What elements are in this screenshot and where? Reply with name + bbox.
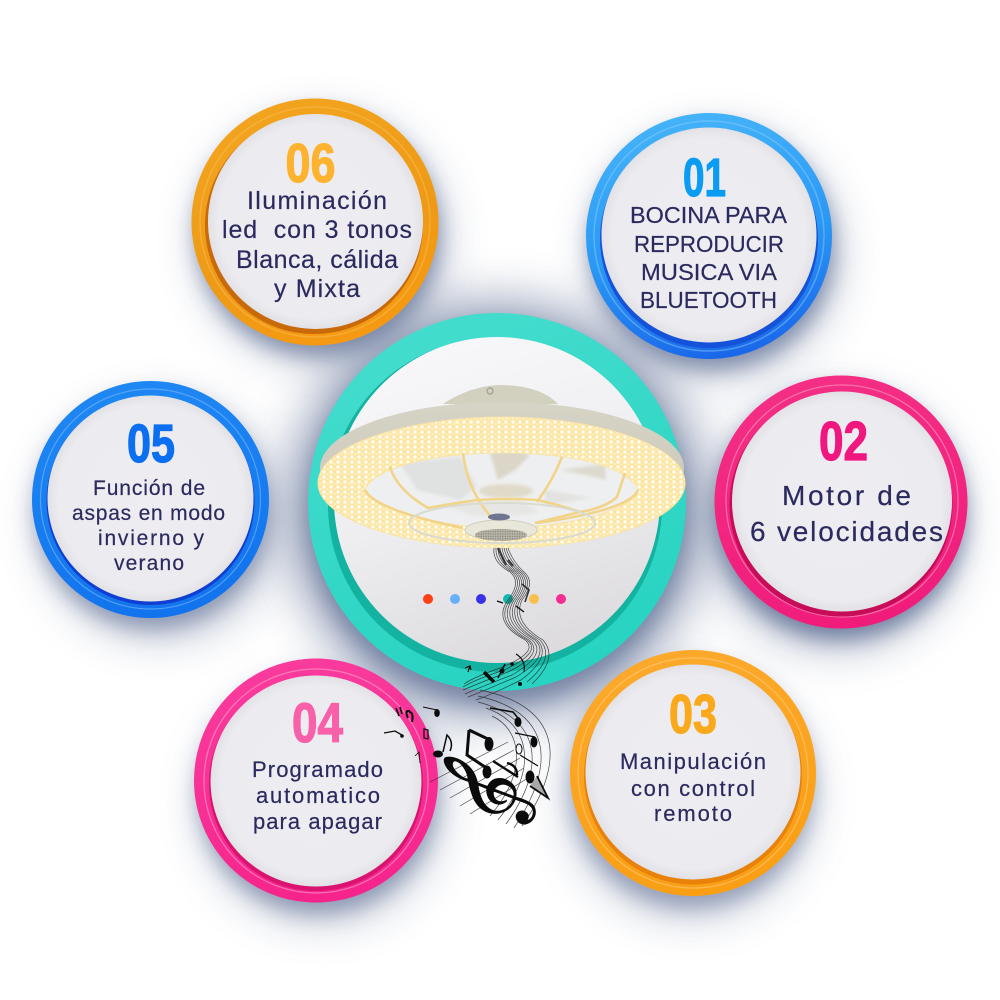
ring [586, 113, 832, 359]
teal ring [308, 313, 686, 691]
description: led con 3 tonos [222, 216, 412, 244]
description: Blanca, cálida [236, 246, 398, 274]
fan blades [400, 450, 606, 517]
description: Iluminación [247, 187, 387, 215]
ring [192, 98, 438, 346]
description: Manipulación [620, 749, 766, 774]
fan lower cage and speaker [409, 503, 595, 543]
panel: 06 lighting [192, 98, 438, 346]
small music notes [384, 707, 548, 798]
description: aspas en modo [72, 502, 225, 525]
description: Motor de [782, 480, 911, 511]
description: verano [114, 552, 184, 575]
number: 06 [286, 132, 336, 194]
colour dots [423, 594, 566, 604]
description: con control [631, 776, 755, 801]
description: BLUETOOTH [640, 287, 777, 313]
description: remoto [654, 801, 732, 826]
description [72, 477, 225, 575]
panel: 05 winter summer [32, 381, 269, 618]
panel: 01 speaker [586, 113, 832, 359]
description: para apagar [253, 809, 382, 834]
fan opening [364, 452, 638, 528]
fan LED ring [318, 417, 685, 548]
description [620, 749, 766, 826]
number: 01 [683, 148, 726, 208]
number: 03 [669, 683, 717, 745]
soft drop shadows [35, 112, 965, 918]
description: y Mixta [274, 275, 360, 303]
ring [32, 381, 269, 618]
panel: 04 timer [194, 658, 438, 902]
description: Programado [252, 757, 383, 782]
description: MUSICA VIA [641, 259, 778, 285]
number: 02 [819, 410, 868, 472]
number: 04 [292, 691, 343, 754]
notes on teal ring [465, 548, 529, 686]
description: REPRODUCIR [634, 231, 784, 257]
panel: 03 remote [570, 650, 816, 896]
treble clef: 𝄞 [425, 741, 545, 844]
description: automatico [256, 783, 380, 808]
fan ceiling base [443, 385, 558, 404]
fan top band [320, 402, 684, 534]
ring [194, 658, 438, 902]
description [252, 757, 383, 834]
description [222, 187, 412, 303]
number: 05 [127, 414, 175, 474]
description: Función de [93, 477, 205, 500]
description [630, 202, 788, 313]
fan cage wires [365, 453, 638, 528]
description [750, 480, 943, 547]
panel: 02 speeds [714, 376, 968, 628]
large beamed note [467, 730, 494, 778]
panel: central fan circle [308, 313, 686, 691]
description: BOCINA PARA [630, 202, 788, 228]
music ribbon and notes [384, 548, 550, 844]
wavy staff [430, 548, 550, 828]
ring [570, 650, 816, 896]
white disc [334, 337, 660, 663]
description: invierno y [98, 527, 204, 550]
ring [714, 376, 968, 628]
description: 6 velocidades [750, 516, 943, 547]
